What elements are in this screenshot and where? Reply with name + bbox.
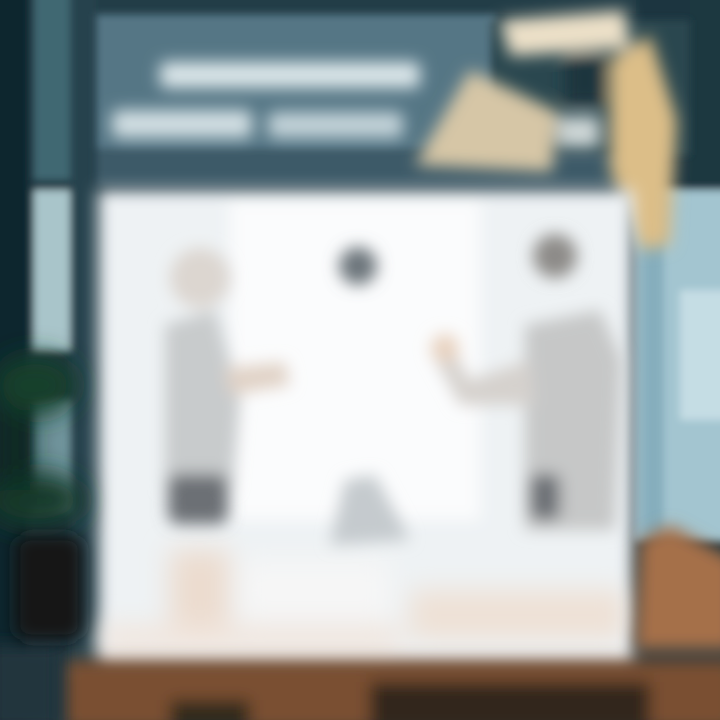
heading text lines, illegible [112, 62, 420, 138]
table wood edge [65, 525, 720, 720]
floor bottom left [0, 645, 58, 720]
plant pot [15, 535, 83, 640]
person: left [165, 248, 290, 524]
person: right [430, 234, 622, 530]
plant [0, 355, 85, 528]
upper heading panel [96, 14, 690, 186]
person: middle [330, 247, 410, 545]
whiteboard [98, 190, 633, 670]
pendant lamps [415, 10, 677, 250]
table surface [100, 550, 625, 653]
